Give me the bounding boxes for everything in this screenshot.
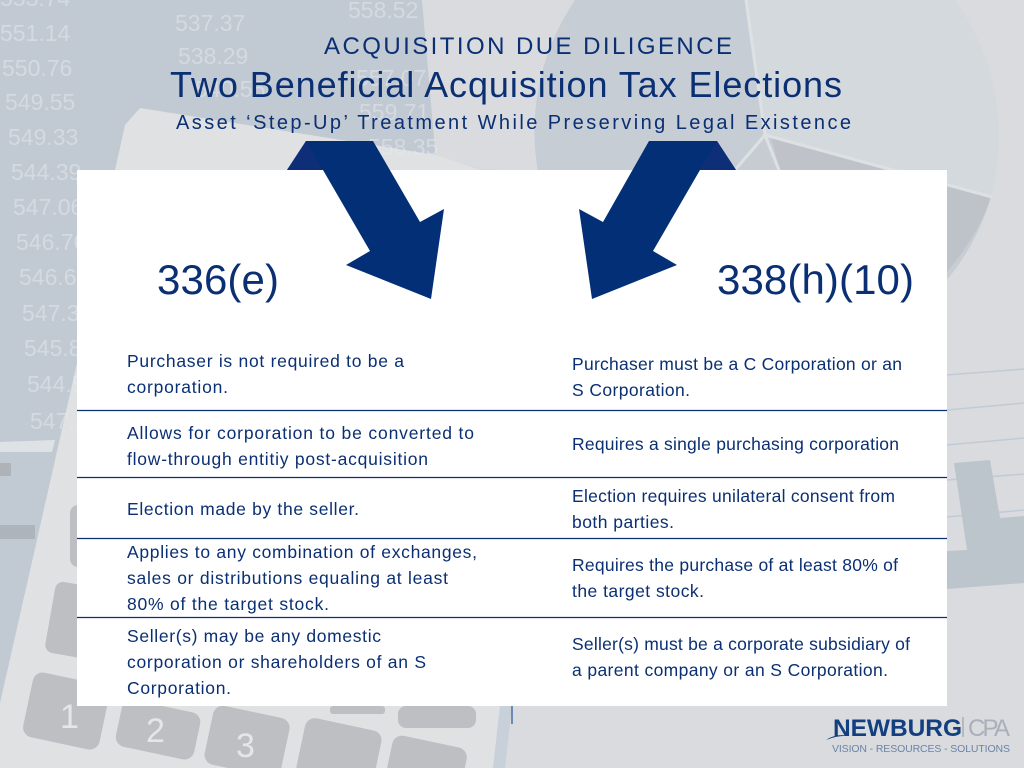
- background photo: calculator, pie chart and stock figures: 551.14: [0, 20, 71, 46]
- background photo: calculator, pie chart and stock figures: 558.35: [368, 134, 438, 160]
- logo tagline: VISION - RESOURCES - SOLUTIONS: [832, 743, 1010, 755]
- right column: 338(h)(10) criteria: [572, 354, 910, 680]
- background photo: calculator, pie chart and stock figures: 540.55: [195, 76, 265, 102]
- row 2 left: Allows for corporation to be converted to: [127, 423, 474, 443]
- row dividers: [77, 410, 947, 618]
- white comparison panel: [77, 170, 947, 706]
- eyebrow heading: ACQUISITION DUE DILIGENCE: [324, 33, 732, 60]
- logo divider: [962, 717, 964, 737]
- subtitle: Asset ‘Step-Up’ Treatment While Preserving Legal Existence: [176, 112, 851, 134]
- background photo: calculator, pie chart and stock figures: 3: [236, 727, 255, 765]
- row 4 left: Applies to any combination of exchanges,: [127, 542, 477, 562]
- row 3 left: Election made by the seller.: [127, 499, 359, 519]
- background photo: calculator, pie chart and stock figures: 544.52: [27, 371, 97, 397]
- background photo: calculator, pie chart and stock figures: 545.87: [24, 335, 94, 361]
- background photo: calculator, pie chart and stock figures: 549.55: [5, 89, 75, 115]
- row 4 left: sales or distributions equaling at least: [127, 568, 448, 588]
- background photo: calculator, pie chart and stock figures: 549.33: [8, 124, 78, 150]
- row 4 left: 80% of the target stock.: [127, 594, 329, 614]
- heading block: [170, 33, 851, 134]
- arrow: pointing to 338(h)(10): [579, 141, 736, 299]
- background photo: calculator, pie chart and stock figures: 537.37: [175, 10, 245, 36]
- background photo: calculator, pie chart and stock figures: 547.31: [22, 300, 92, 326]
- background photo: calculator, pie chart and stock figures: 559.71: [359, 99, 429, 125]
- background photo: calculator, pie chart and stock figures: 547.06: [13, 194, 83, 220]
- row 5 right: [572, 634, 910, 680]
- row 2 right: Requires a single purchasing corporation: [572, 434, 899, 454]
- row 4 right: [572, 555, 898, 601]
- background photo: calculator, pie chart and stock figures: 557.07: [356, 65, 426, 91]
- row 5 left: Corporation.: [127, 678, 231, 698]
- row 1 right: [572, 354, 902, 400]
- logo CPA: CPA: [968, 715, 1010, 742]
- row 5 left: Seller(s) may be any domestic: [127, 626, 381, 646]
- row 4 right: Requires the purchase of at least 80% of: [572, 555, 898, 575]
- background photo: calculator, pie chart and stock figures: 546.76: [16, 229, 86, 255]
- row 5 right: a parent company or an S Corporation.: [572, 660, 888, 680]
- row 1 right: S Corporation.: [572, 380, 690, 400]
- logo wordmark: NEWBURG: [833, 715, 962, 742]
- column heading: 338(h)(10): 338(h)(10): [717, 256, 914, 303]
- background photo: calculator, pie chart and stock figures: 544.39: [11, 159, 81, 185]
- row 5 left: corporation or shareholders of an S: [127, 652, 426, 672]
- background photo: calculator, pie chart and stock figures: 547.11: [30, 408, 99, 434]
- row 2 left: flow-through entitiy post-acquisition: [127, 449, 428, 469]
- row 4 right: the target stock.: [572, 581, 704, 601]
- main title: Two Beneficial Acquisition Tax Elections: [170, 64, 842, 105]
- row 1 left: Purchaser is not required to be a: [127, 351, 404, 371]
- column heading: 336(e): 336(e): [157, 256, 279, 303]
- background photo: calculator, pie chart and stock figures: 1: [60, 698, 79, 736]
- row 2 left: [127, 423, 474, 469]
- row 3 right: [572, 486, 895, 532]
- row 5 right: Seller(s) must be a corporate subsidiary of: [572, 634, 910, 654]
- row 3 right: both parties.: [572, 512, 674, 532]
- left column: 336(e) criteria: [127, 351, 477, 698]
- row 4 left: [127, 542, 477, 614]
- row 5 left: [127, 626, 426, 698]
- background photo: calculator, pie chart and stock figures: 550.76: [2, 55, 72, 81]
- row 3 right: Election requires unilateral consent from: [572, 486, 895, 506]
- column divider stub: [511, 706, 513, 724]
- row 1 right: Purchaser must be a C Corporation or an: [572, 354, 902, 374]
- row 1 left: corporation.: [127, 377, 228, 397]
- arrow: pointing to 336(e): [287, 141, 444, 299]
- background photo: calculator, pie chart and stock figures: 2: [146, 712, 165, 750]
- background photo: calculator, pie chart and stock figures: 538.29: [178, 43, 248, 69]
- logo swoosh: [826, 735, 850, 740]
- logo: Newburg CPA: [826, 715, 1010, 755]
- row 1 left: [127, 351, 404, 397]
- background photo: calculator, pie chart and stock figures: 546.67: [19, 264, 89, 290]
